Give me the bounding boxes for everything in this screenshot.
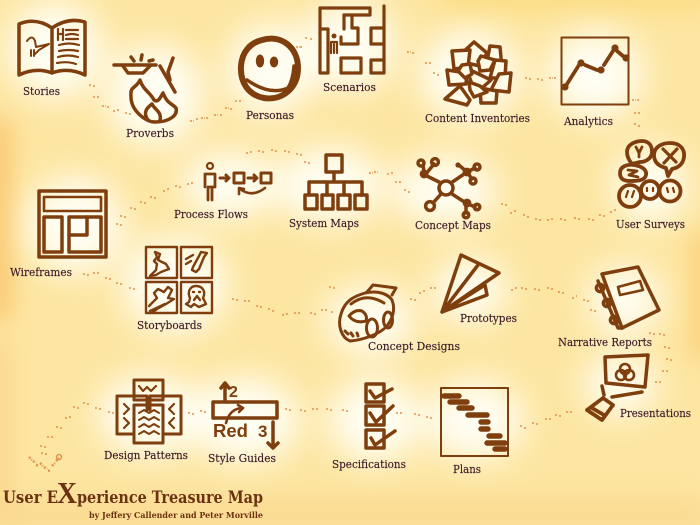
X marks the spot — [29, 454, 62, 471]
label: Stories — [23, 84, 60, 98]
icon: speech bubbles and faces — [619, 141, 684, 207]
icon: eyes — [256, 54, 278, 68]
icon: type hierarchy: 3 — [258, 422, 267, 441]
icon: node network — [418, 159, 480, 218]
icon: paper airplane — [442, 255, 499, 312]
System Maps — [289, 155, 367, 230]
title: User E — [3, 488, 58, 507]
label: Storyboards — [137, 318, 202, 332]
icon: page layout — [39, 191, 106, 257]
icon: checklist — [366, 384, 395, 448]
icon: pile of sticky notes — [445, 42, 511, 105]
Analytics — [561, 38, 630, 128]
label: Specifications — [332, 457, 406, 471]
Scenarios — [320, 6, 384, 94]
label: Style Guides — [208, 451, 276, 465]
icon: type hierarchy — [213, 383, 278, 448]
icon: gantt chart — [441, 388, 508, 456]
icon: maze — [320, 6, 384, 73]
label: Concept Designs — [368, 339, 460, 353]
icon: projector and screen — [587, 355, 648, 420]
title: perience Treasure Map — [77, 488, 263, 507]
icon: sketched car — [340, 285, 396, 341]
byline: by Jeffery Callender and Peter Morville — [89, 511, 264, 521]
Storyboards — [137, 247, 212, 332]
label: Plans — [453, 462, 481, 476]
Prototypes — [442, 255, 517, 325]
Presentations — [587, 355, 691, 420]
icon: four comic panels — [146, 247, 212, 313]
label: System Maps — [289, 216, 359, 230]
icon: line chart — [561, 38, 630, 104]
footprint trail — [40, 38, 672, 454]
icon: smiley face — [241, 39, 298, 98]
icon: ring-bound notebook — [596, 267, 659, 328]
icon: pattern cards — [117, 380, 181, 443]
label: Narrative Reports — [558, 335, 652, 349]
icon: hierarchy chart — [305, 155, 367, 209]
label: Concept Maps — [415, 218, 491, 232]
label: Presentations — [620, 406, 691, 420]
icon: fire and dish — [114, 55, 176, 122]
Process Flows — [174, 163, 271, 221]
Wireframes — [10, 191, 106, 279]
label: Design Patterns — [104, 448, 188, 462]
Design Patterns — [104, 380, 188, 462]
Concept Designs — [340, 285, 460, 353]
icon: person and flow boxes — [205, 163, 271, 200]
User Surveys — [616, 141, 685, 231]
title: X — [57, 475, 78, 510]
Stories — [19, 20, 85, 98]
Narrative Reports — [558, 267, 659, 349]
title — [3, 475, 263, 510]
label: Process Flows — [174, 207, 248, 221]
label: Analytics — [563, 114, 613, 128]
icon: open book — [19, 20, 85, 75]
label: Wireframes — [10, 265, 72, 279]
icon: type hierarchy: 2 — [229, 384, 238, 401]
label: Scenarios — [323, 80, 376, 94]
label: Proverbs — [126, 126, 174, 140]
Content Inventories — [425, 42, 530, 125]
Plans — [441, 388, 508, 476]
Style Guides — [208, 383, 278, 465]
label: Personas — [246, 108, 294, 122]
Personas — [241, 39, 298, 122]
Proverbs — [114, 55, 176, 140]
icon: type hierarchy: Red — [213, 421, 248, 441]
label: Content Inventories — [425, 111, 530, 125]
Concept Maps — [415, 159, 491, 232]
label: Prototypes — [460, 311, 517, 325]
Specifications — [332, 384, 406, 471]
label: User Surveys — [616, 217, 685, 231]
